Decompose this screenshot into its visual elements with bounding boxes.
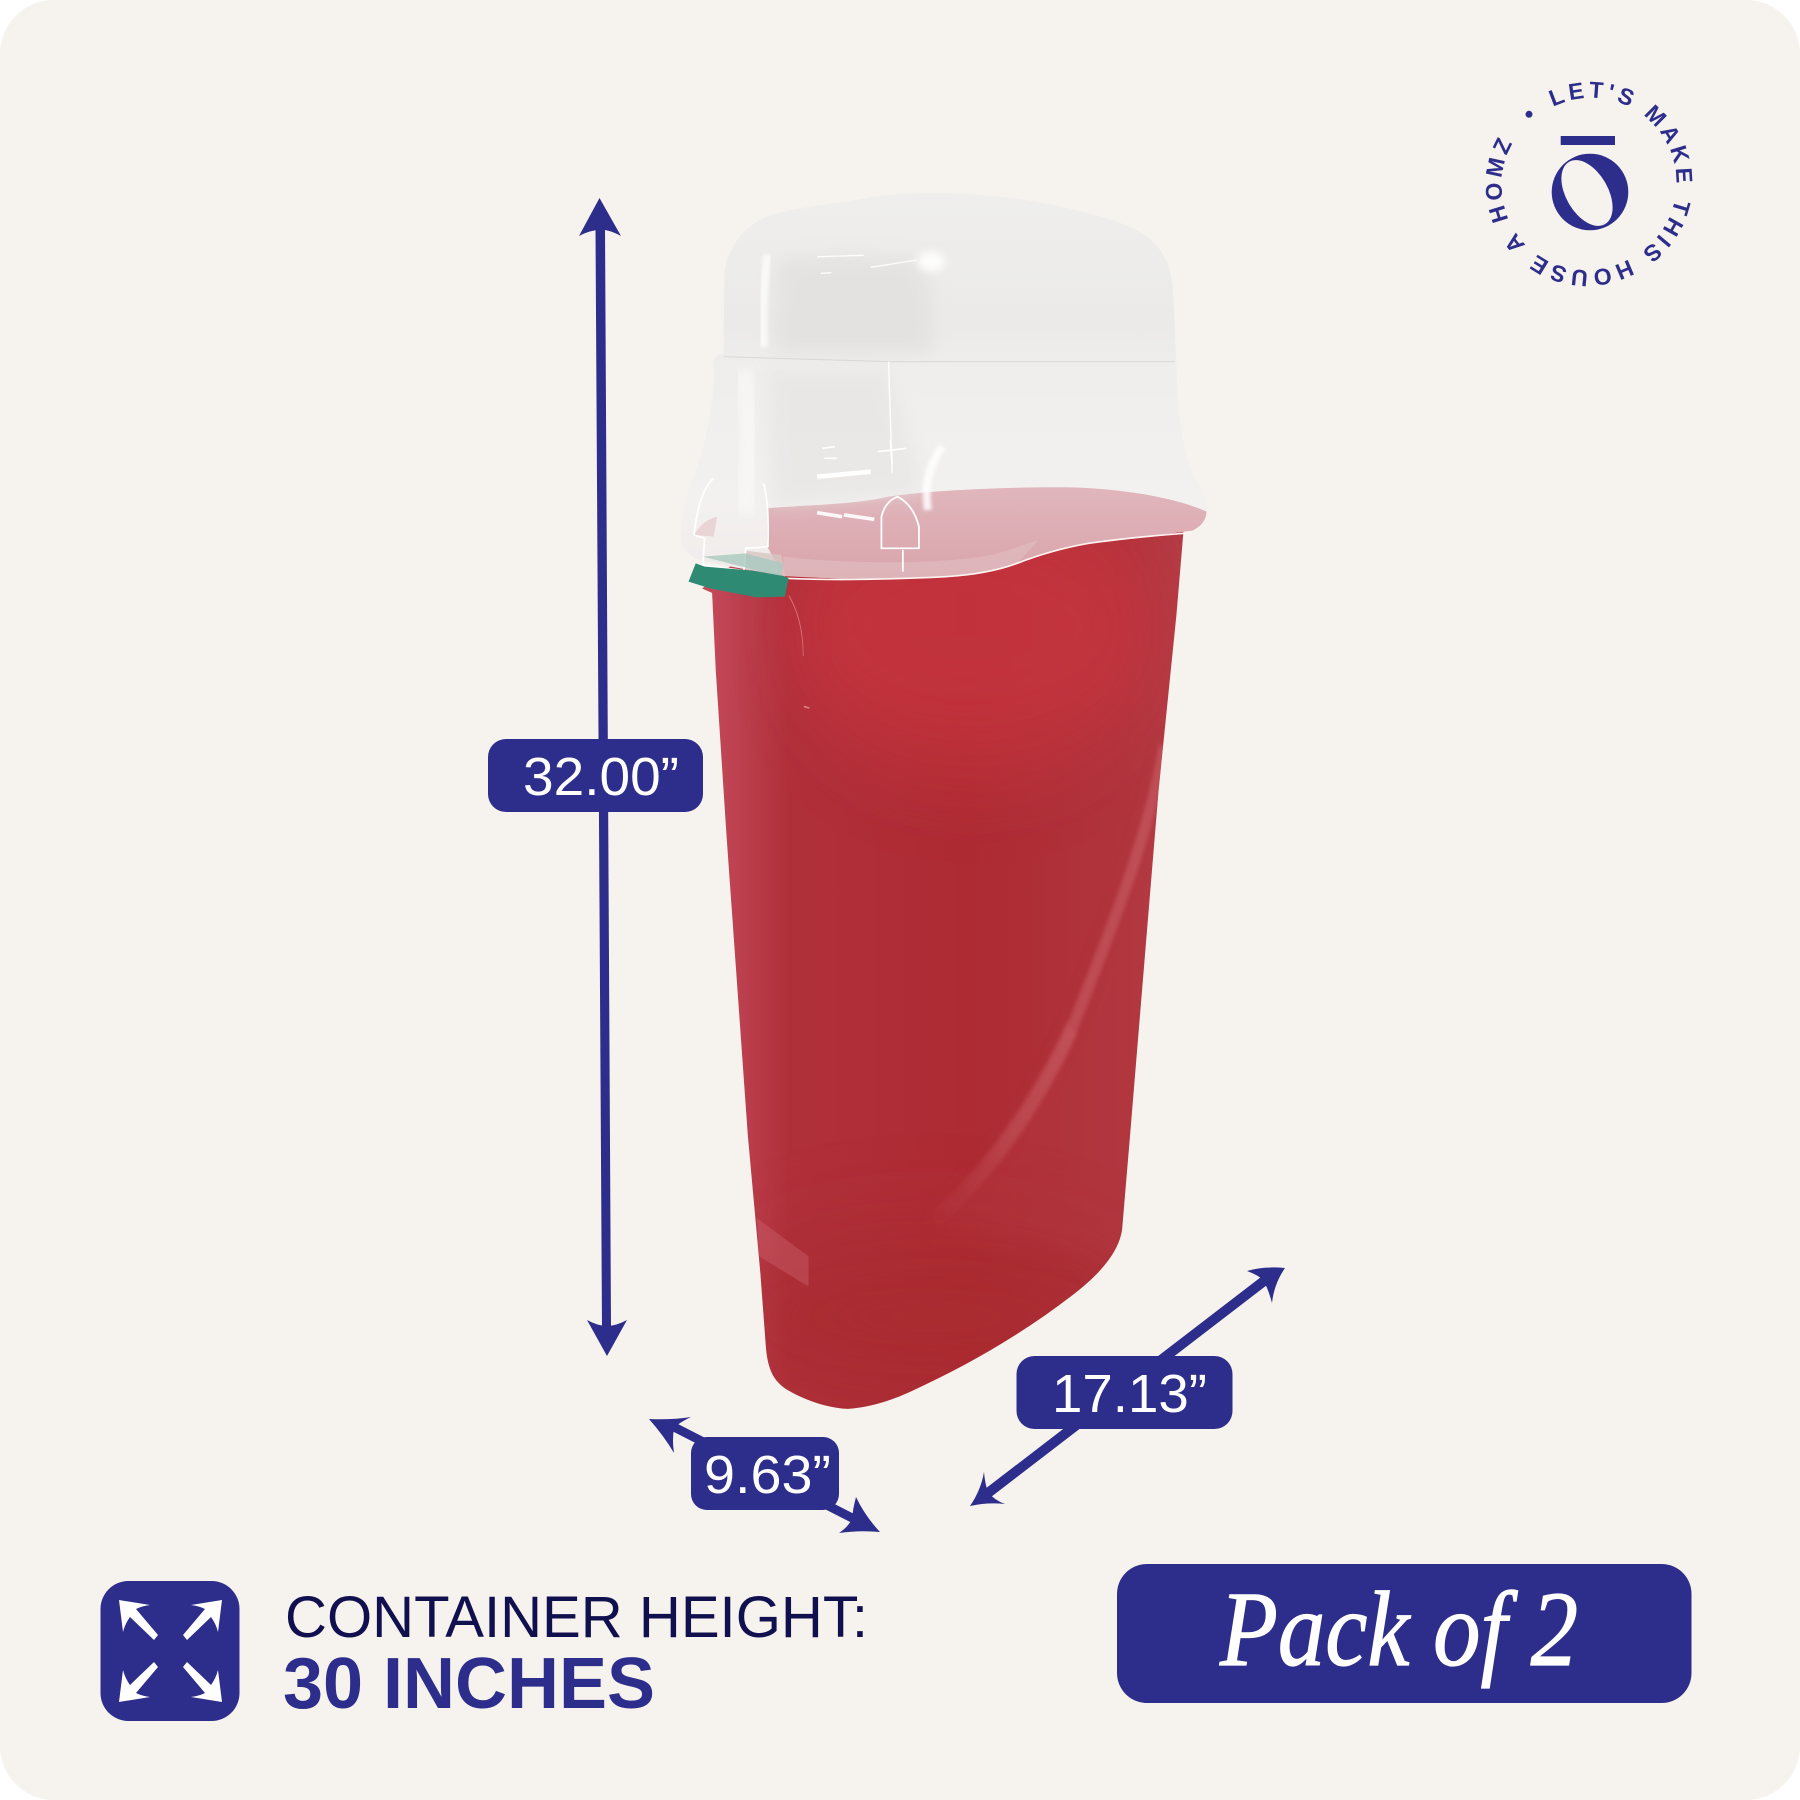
- container height text: [283, 1585, 868, 1724]
- icon: expand arrows: [100, 1581, 240, 1721]
- product: red container with clear lid: [681, 193, 1207, 1409]
- label: 9.63: [691, 1437, 839, 1510]
- container body: [702, 483, 1184, 1409]
- logo ring text: LET'S MAKE THIS HOUSE A HOMZ: [1486, 82, 1692, 286]
- badge: pack of 2: Pack of 2: [1219, 1571, 1578, 1689]
- height value: 30 INCHES: [283, 1644, 655, 1724]
- logo dot: [1526, 111, 1532, 118]
- label: 17.13: 17.13”: [1052, 1364, 1207, 1424]
- height caption: CONTAINER HEIGHT:: [285, 1585, 868, 1650]
- green latch: [689, 553, 789, 597]
- arrow: vertical: [579, 198, 627, 1356]
- label: 32.00: [488, 739, 703, 812]
- lid inner window shading: [774, 255, 931, 353]
- lid seam lines: [724, 357, 1175, 362]
- lid clip outlines: [694, 478, 919, 572]
- badge: pack of 2: [1117, 1564, 1692, 1703]
- label: 17.13: [1016, 1356, 1232, 1429]
- logo letter o: [1551, 151, 1628, 235]
- label: 32.00: 32.00”: [523, 747, 679, 807]
- dimension: width 9.63 inches: [649, 1417, 880, 1533]
- dimension: length 17.13 inches: [970, 1267, 1285, 1506]
- clear lid: [681, 193, 1207, 580]
- arrow: diagonal long: [970, 1267, 1285, 1506]
- dimension: height 32.00 inches: [488, 198, 703, 1356]
- arrow: diagonal short: [649, 1417, 880, 1533]
- logo macron bar: [1561, 136, 1615, 145]
- label: 9.63: 9.63”: [704, 1445, 831, 1505]
- logo badge: [1486, 82, 1692, 286]
- lid interior pink rim seen through plastic: [767, 487, 1206, 579]
